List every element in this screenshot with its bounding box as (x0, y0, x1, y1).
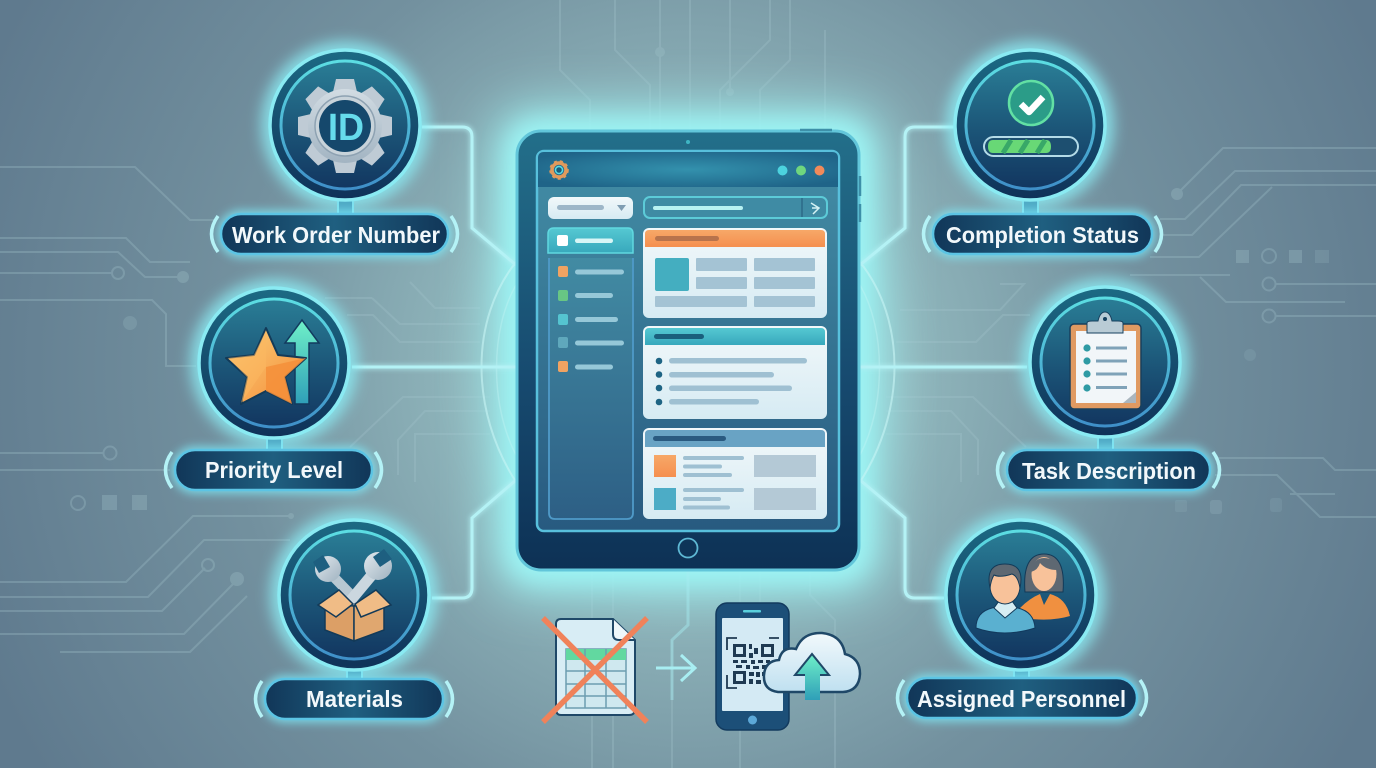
label pill: task description: Task Description (1022, 458, 1196, 484)
label pill: assigned personnel (898, 674, 1146, 722)
home button (678, 538, 698, 558)
item: priority level (166, 279, 382, 494)
search bar (644, 197, 827, 218)
tablet camera (686, 140, 690, 144)
item: completion status (924, 41, 1162, 258)
icon: cloud upload (764, 633, 860, 700)
item: task description (998, 278, 1220, 494)
screen header (538, 152, 838, 187)
card: orange header (643, 228, 827, 318)
icon: progress bar (984, 137, 1078, 156)
item: work order number (212, 41, 458, 258)
label pill: materials (256, 675, 452, 723)
item: materials (256, 511, 452, 723)
icon: phone with QR code (716, 603, 789, 730)
label pill: priority level (166, 446, 382, 494)
card: bullet list (643, 326, 827, 419)
label pill: completion status: Completion Status (946, 222, 1139, 248)
icon: two people (976, 554, 1070, 633)
label pill: work order number (212, 210, 458, 258)
central glow behind tablet (482, 112, 894, 590)
icon: check badge (1009, 81, 1053, 125)
label pill: materials: Materials (306, 686, 403, 712)
red cross (543, 618, 647, 722)
icon: ID gear (298, 79, 392, 173)
icon: star (226, 328, 306, 404)
arrow: spreadsheet to mobile (656, 655, 695, 681)
card: media list (643, 428, 827, 519)
icon: ID gear: ID (328, 107, 364, 149)
window dots (778, 166, 824, 176)
tablet screen (537, 151, 839, 531)
label pill: assigned personnel: Assigned Personnel (917, 686, 1126, 712)
label pill: work order number: Work Order Number (232, 222, 440, 248)
sidebar active item (548, 228, 633, 253)
icon: wrenches and box (313, 549, 392, 641)
label pill: completion status (924, 210, 1162, 258)
icon: rising arrow (285, 320, 319, 404)
dropdown (548, 197, 633, 219)
gear logo (550, 161, 568, 179)
label pill: task description (998, 446, 1220, 494)
item: assigned personnel (898, 511, 1146, 722)
tablet side buttons (800, 130, 860, 222)
tablet bezel (517, 131, 859, 570)
connector lines (352, 127, 1027, 700)
label pill: priority level: Priority Level (205, 457, 343, 483)
icon: crossed-out spreadsheet (543, 618, 647, 722)
tablet (517, 130, 860, 570)
icon: clipboard (1070, 312, 1141, 409)
sidebar list (549, 258, 633, 519)
QR code (727, 638, 779, 688)
